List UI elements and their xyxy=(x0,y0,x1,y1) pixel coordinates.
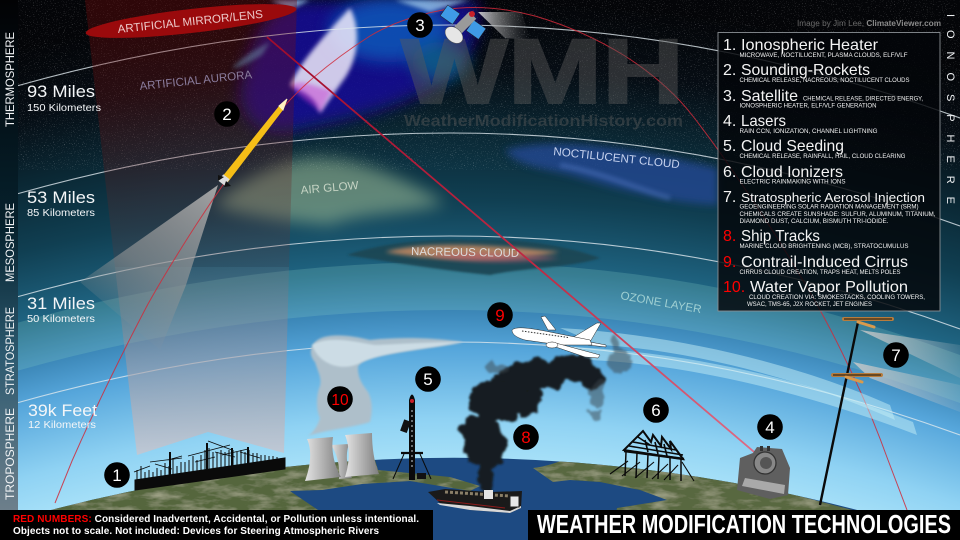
item 3: IONOSPHERIC HEATER, ELF/VLF GENERATION xyxy=(740,102,877,110)
item 7: DIAMOND DUST, CALCIUM, BISMUTH TRI-IODIDE. xyxy=(740,218,889,225)
altitude labels: 50 Kilometers xyxy=(27,314,95,325)
item 7 xyxy=(723,189,936,225)
WMH watermark: WMH xyxy=(401,21,684,123)
noctilucent cloud xyxy=(505,144,718,205)
cloud ionizer frame xyxy=(610,431,694,481)
item 6: Cloud Ionizers xyxy=(741,164,843,181)
altitude labels: 93 Miles xyxy=(27,82,95,101)
starfield xyxy=(18,0,960,170)
disclaimer bar xyxy=(0,510,433,540)
number badges: 5 xyxy=(423,370,433,389)
item 1: MICROWAVE, NOCTILUCENT, PLASMA CLOUDS, ELF/VLF xyxy=(740,52,908,59)
smoke from ship xyxy=(458,337,630,496)
legend panel xyxy=(718,32,940,311)
altitude labels: 150 Kilometers xyxy=(27,103,101,114)
air glow cloud xyxy=(215,158,445,225)
earth land xyxy=(51,460,852,510)
ionosphere label: IONOSPHERE xyxy=(944,14,956,204)
item 8: MARINE CLOUD BRIGHTENING (MCB), STRATOCUMULUS xyxy=(740,243,908,250)
mirror beam xyxy=(85,0,297,267)
item 4: RAIN CCN, IONIZATION, CHANNEL LIGHTNING xyxy=(740,128,878,135)
item 3 xyxy=(723,88,923,110)
heater beam xyxy=(115,267,289,455)
item 10: CLOUD CREATION VIA: SMOKESTACKS, COOLING TOWERS, xyxy=(749,294,925,301)
atmosphere layer strip: THERMOSPHERE xyxy=(3,32,17,127)
number badges: 7 xyxy=(891,346,901,365)
item 3: 3. xyxy=(723,88,736,105)
item 2: Sounding-Rockets xyxy=(741,62,870,79)
WMH watermark: WeatherModificationHistory.com xyxy=(404,113,683,130)
item 8 xyxy=(723,228,908,250)
artificial mirror xyxy=(84,0,298,45)
rocket plume xyxy=(80,185,218,350)
container ship xyxy=(428,489,522,513)
altitude labels: 12 Kilometers xyxy=(28,420,96,431)
number badges: 1 xyxy=(112,466,122,485)
contrail bands xyxy=(560,328,917,435)
airplane xyxy=(512,316,606,358)
disclaimer bar: RED NUMBERS: Considered Inadvertent, Accidental, or Pollution unless intentional. xyxy=(13,514,419,525)
item 4 xyxy=(723,113,878,135)
ionospheric heater array xyxy=(134,441,285,490)
nacreous cloud xyxy=(347,240,600,275)
item 5 xyxy=(723,138,906,160)
item 7: 7. xyxy=(723,189,736,206)
item 1: Ionospheric Heater xyxy=(741,37,879,54)
sky labels: AIR GLOW xyxy=(300,180,359,197)
rocket xyxy=(218,99,287,187)
altitude labels: 53 Miles xyxy=(27,188,95,207)
number badges: 4 xyxy=(765,418,775,437)
laser beam xyxy=(267,37,767,463)
item 1: 1. xyxy=(723,37,736,54)
item 6 xyxy=(723,164,846,186)
item 3: Satellite xyxy=(741,88,798,105)
atmosphere layer strip xyxy=(0,0,18,510)
cloud seeding tower xyxy=(393,394,431,480)
ozone layer band xyxy=(18,262,960,403)
atmosphere layer strip: MESOSPHERE xyxy=(3,203,17,282)
item 10: 10. xyxy=(723,279,745,296)
sky labels: ARTIFICIAL AURORA xyxy=(139,69,253,93)
item 6: ELECTRIC RAINMAKING WITH IONS xyxy=(740,178,846,186)
item 2: CHEMICAL RELEASE, NACREOUS, NOCTILUCENT CLOUDS xyxy=(740,77,910,84)
item 9: 9. xyxy=(723,254,736,271)
number badges: 3 xyxy=(415,16,425,35)
item 3: CHEMICAL RELEASE, DIRECTED ENERGY, xyxy=(803,96,923,102)
aurora xyxy=(232,0,478,131)
earth ocean xyxy=(0,458,960,540)
sky labels: NOCTILUCENT CLOUD xyxy=(553,146,680,171)
item 2 xyxy=(723,62,910,84)
altitude labels: 31 Miles xyxy=(27,294,95,313)
item 1 xyxy=(723,37,908,59)
cooling towers xyxy=(305,433,379,481)
altitude labels: 85 Kilometers xyxy=(27,208,95,219)
number badges: 10 xyxy=(331,392,349,409)
image credit: Image by Jim Lee, ClimateViewer.com xyxy=(797,19,941,28)
item 8: 8. xyxy=(723,228,736,245)
item 4: Lasers xyxy=(741,113,786,130)
item 2: 2. xyxy=(723,62,736,79)
item 5: 5. xyxy=(723,138,736,155)
sky labels: NACREOUS CLOUD xyxy=(411,246,519,260)
item 5: CHEMICAL RELEASE, RAINFALL, HAIL, CLOUD CLEARING xyxy=(740,153,906,160)
item 7: Stratospheric Aerosol Injection xyxy=(741,190,925,205)
altitude labels: 39k Feet xyxy=(28,401,97,420)
item 10 xyxy=(723,279,925,308)
aerosol injection pole and plumes xyxy=(820,319,960,505)
item 7: GEOENGINEERING SOLAR RADIATION MANAGEMENT (SRM) xyxy=(740,204,918,210)
item 9 xyxy=(723,254,908,276)
laser device xyxy=(737,446,790,499)
item 10: Water Vapor Pollution xyxy=(750,279,908,296)
item 6: 6. xyxy=(723,164,736,181)
altitude lines xyxy=(18,25,960,435)
number badges: 2 xyxy=(222,105,232,124)
altitude labels xyxy=(27,82,101,431)
disclaimer bar: Objects not to scale. Not included: Devices for Steering Atmospheric Rivers xyxy=(13,526,379,537)
sky labels: ARTIFICIAL MIRROR/LENS xyxy=(117,9,264,36)
number badges: 6 xyxy=(651,401,661,420)
item 5: Cloud Seeding xyxy=(741,138,844,155)
satellite xyxy=(440,5,530,47)
water vapor plume xyxy=(308,335,463,436)
number badges: 8 xyxy=(521,428,531,447)
item 9: Contrail-Induced Cirrus xyxy=(741,254,908,271)
item 4: 4. xyxy=(723,113,736,130)
sky labels xyxy=(117,9,702,316)
number badges: 9 xyxy=(495,306,505,325)
item 8: Ship Tracks xyxy=(741,228,820,245)
item 9: CIRRUS CLOUD CREATION, TRAPS HEAT, MELTS POLES xyxy=(740,269,900,276)
item 10: WSAC, TMS-65, J2X ROCKET, JET ENGINES xyxy=(747,301,872,308)
number badges xyxy=(104,12,909,488)
sky labels: OZONE LAYER xyxy=(619,290,702,316)
item 7: CHEMICALS CREATE SUNSHADE: SULFUR, ALUMINUM, TITANIUM, xyxy=(740,211,936,218)
atmosphere layer strip: STRATOSPHERE xyxy=(3,307,17,395)
atmosphere layer strip: TROPOSPHERE xyxy=(3,408,17,500)
